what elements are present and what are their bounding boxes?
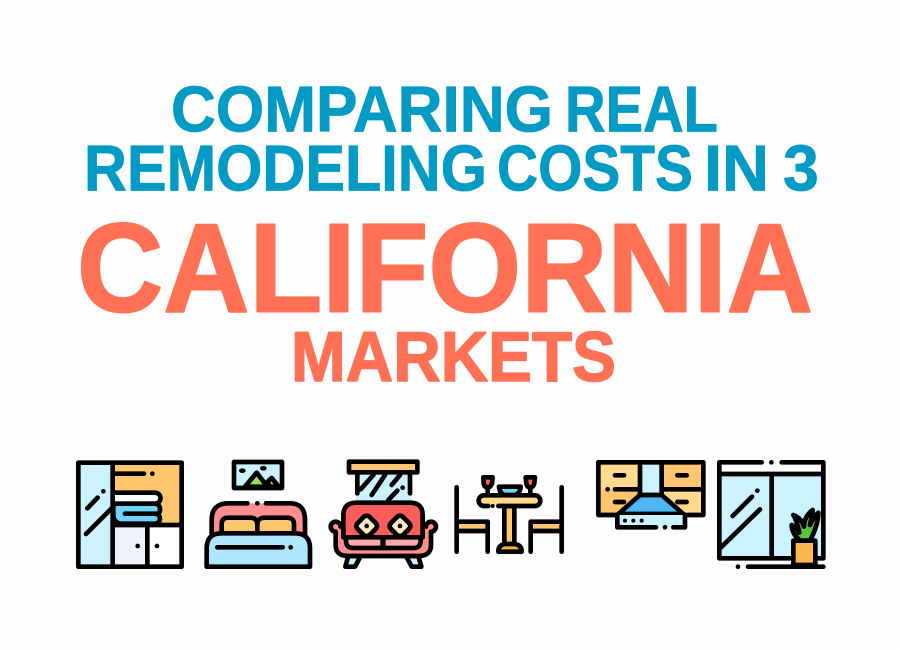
title: comparing real remodeling costs in 3: 3	[783, 132, 819, 204]
title: comparing real remodeling costs in 3: IN	[704, 132, 769, 204]
heading: california: CALIFORNIA	[77, 198, 813, 338]
icon: sofa with mirror	[331, 462, 436, 567]
icon: dining table and chairs	[457, 477, 562, 552]
title: comparing real remodeling costs in 3: REMODELING	[84, 132, 487, 204]
title: comparing real remodeling costs in 3	[84, 74, 819, 204]
icon: window with potted plant	[719, 460, 823, 569]
title: comparing real remodeling costs in 3: COMPARING	[171, 74, 553, 146]
title: comparing real remodeling costs in 3: COSTS	[497, 132, 693, 204]
icon: wardrobe	[78, 463, 182, 567]
icon: bed with picture	[207, 462, 310, 567]
picture frame	[234, 462, 282, 488]
heading: markets: MARKETS	[291, 317, 616, 396]
potted plant	[792, 510, 818, 565]
title: comparing real remodeling costs in 3: REAL	[565, 74, 718, 146]
icon: kitchen cabinets with range hood	[598, 462, 703, 530]
